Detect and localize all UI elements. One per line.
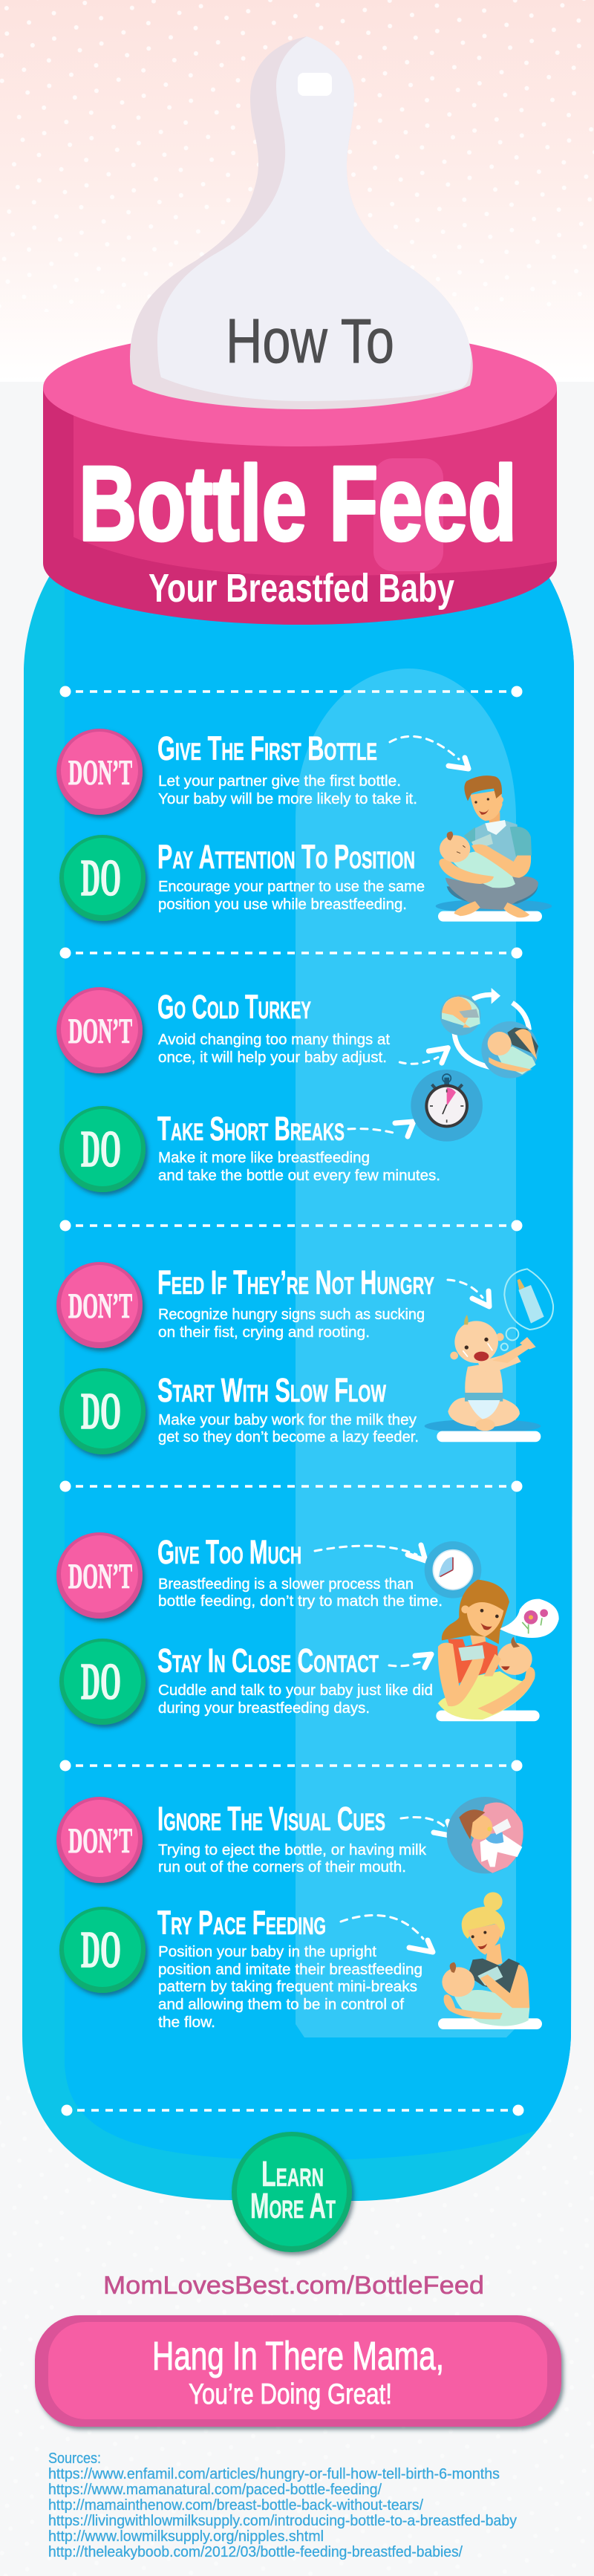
arrow: to stopwatch	[348, 1122, 414, 1136]
badge: don't 2	[56, 987, 143, 1073]
badge: don't 2: DON’T	[68, 1012, 132, 1051]
arrow: to baby rejecting bottle	[401, 1817, 454, 1836]
tip: stay in close contact: Cuddle and talk to your baby just like did	[158, 1682, 433, 1699]
tip: try pace feeding: and allowing them to be in control of	[158, 1996, 404, 2013]
website link: MomLovesBest.com/BottleFeed	[103, 2271, 484, 2300]
tip: give the first bottle	[157, 729, 417, 807]
tip: try pace feeding	[157, 1904, 422, 2031]
tip: take short breaks: and take the bottle out every few minutes.	[158, 1167, 440, 1184]
badge: don't 5: DON’T	[68, 1821, 132, 1861]
tip: start with slow flow: get so they don’t become a lazy feeder.	[158, 1428, 419, 1445]
arrow: to clock	[315, 1545, 425, 1561]
tip: go cold turkey: Avoid changing too many things at	[158, 1031, 390, 1048]
badge: don't 1	[56, 729, 143, 815]
banner: hang in there mama: You’re Doing Great!	[189, 2378, 392, 2410]
illustration: baby rejecting bottle	[447, 1797, 523, 1873]
illustration: switching cycle and arrows	[399, 988, 538, 1079]
tip: take short breaks: Make it more like breastfeeding	[158, 1149, 370, 1166]
illustration: stopwatch	[411, 1070, 483, 1142]
badge: don't 4	[56, 1532, 143, 1619]
tip: give too much	[157, 1533, 443, 1610]
tip: ignore the visual cues: Ignore The Visual Cues	[157, 1800, 385, 1838]
tip: give too much: Give Too Much	[157, 1533, 301, 1571]
tip: try pace feeding: pattern by taking frequent mini-breaks	[158, 1978, 417, 1995]
badge: don't 5	[56, 1797, 143, 1883]
tip: try pace feeding: Position your baby in the upright	[158, 1943, 376, 1960]
tip: try pace feeding: position and imitate their breastfeeding	[158, 1961, 422, 1978]
sources list: http://theleakyboob.com/2012/03/bottle-feeding-breastfed-babies/	[48, 2544, 463, 2560]
tip: take short breaks	[157, 1110, 440, 1184]
bottle cap	[37, 329, 564, 631]
tip: stay in close contact: Stay In Close Contact	[157, 1642, 379, 1679]
tip: pay attention to position	[157, 838, 425, 913]
badge: don't 3	[56, 1262, 143, 1348]
tip: ignore the visual cues	[157, 1800, 427, 1876]
sources list: https://www.mamanatural.com/paced-bottle-feeding/	[48, 2482, 382, 2498]
tip: feed if they're not hungry: on their fist, crying and rooting.	[158, 1324, 370, 1341]
tip: start with slow flow: Make your baby work for the milk they	[158, 1411, 417, 1428]
tip: stay in close contact	[157, 1642, 433, 1717]
section dividers	[59, 686, 524, 2115]
badge: do 1: DO	[81, 850, 121, 907]
tip: give the first bottle: Give The First Bottle	[157, 729, 377, 767]
tip: ignore the visual cues: run out of the corners of their mouth.	[158, 1858, 406, 1876]
tip: give the first bottle: Your baby will be more likely to take it.	[158, 790, 417, 807]
badge: do 4	[59, 1639, 146, 1725]
tip: ignore the visual cues: Trying to eject the bottle, or having milk	[158, 1841, 427, 1858]
badge: don't 3: DON’T	[68, 1287, 132, 1326]
badge: don't 4: DON’T	[68, 1557, 132, 1596]
sources list: http://mamainthenow.com/breast-bottle-back-without-tears/	[48, 2497, 423, 2514]
tip: start with slow flow: Start With Slow Flow	[157, 1371, 387, 1409]
bottle body	[22, 565, 587, 2201]
tip: feed if they're not hungry: Recognize hungry signs such as sucking	[158, 1306, 425, 1323]
tip: feed if they're not hungry: Feed If They’re Not Hungry	[157, 1263, 434, 1301]
tip: take short breaks: Take Short Breaks	[157, 1110, 345, 1148]
tip: try pace feeding: Try Pace Feeding	[157, 1904, 326, 1942]
arrow: to mother	[389, 1654, 431, 1668]
sources list	[48, 2450, 517, 2560]
tip: pay attention to position: Encourage your partner to use the same	[158, 878, 425, 895]
sources list: http://www.lowmilksupply.org/nipples.shtml	[48, 2528, 324, 2545]
tip: stay in close contact: during your breastfeeding days.	[158, 1700, 370, 1717]
badge: don't 1: DON’T	[68, 753, 132, 793]
arrow: to father	[390, 736, 469, 769]
banner: hang in there mama	[35, 2315, 561, 2427]
subtitle: Your Breastfed Baby: Your Breastfed Baby	[148, 566, 454, 611]
sources list: https://www.enfamil.com/articles/hungry-or-full-how-tell-birth-6-months	[48, 2466, 500, 2482]
sources list: Sources:	[48, 2450, 101, 2467]
badge: do 4: DO	[81, 1653, 121, 1711]
badge: do 5	[59, 1907, 146, 1993]
badge: do 3: DO	[81, 1383, 121, 1440]
arrow: to pace feeding mother	[341, 1915, 433, 1952]
badge: do 2	[59, 1106, 146, 1192]
banner: hang in there mama: Hang In There Mama,	[152, 2334, 444, 2378]
nipple	[130, 36, 473, 409]
badge: do 2: DO	[81, 1121, 121, 1178]
tip: pay attention to position: position you use while breastfeeding.	[158, 896, 407, 913]
tip: go cold turkey: once, it will help your baby adjust.	[158, 1049, 387, 1066]
illustration: mother pace feeding	[438, 1892, 542, 2029]
sources list: https://livingwithlowmilksupply.com/introducing-bottle-to-a-breastfed-baby	[48, 2513, 517, 2529]
tip: feed if they're not hungry	[157, 1263, 434, 1341]
tip: give too much: Breastfeeding is a slower process than	[158, 1575, 414, 1593]
badge: do 5: DO	[81, 1922, 121, 1979]
tip: start with slow flow	[157, 1371, 419, 1445]
illustration: mother with baby, clock and speech bubble	[425, 1541, 559, 1721]
title: How To: How To	[226, 306, 394, 376]
tip: go cold turkey: Go Cold Turkey	[157, 988, 311, 1026]
tip: pay attention to position: Pay Attention To Position	[157, 838, 415, 876]
arrow: to crying baby	[448, 1280, 489, 1307]
learn more badge: Learn	[261, 2155, 324, 2194]
badge: do 3	[59, 1368, 146, 1454]
tip: give too much: bottle feeding, don’t try to match the time.	[158, 1593, 443, 1610]
badge: do 1	[59, 835, 146, 921]
illustration: father feeding baby	[436, 775, 552, 922]
tip: go cold turkey	[157, 988, 390, 1066]
tip: try pace feeding: the flow.	[158, 2014, 215, 2031]
tip: give the first bottle: Let your partner give the first bottle.	[158, 773, 401, 790]
learn more badge	[232, 2132, 352, 2252]
learn more badge: More At	[250, 2187, 336, 2226]
illustration: crying baby with bottle thought	[425, 1269, 553, 1442]
